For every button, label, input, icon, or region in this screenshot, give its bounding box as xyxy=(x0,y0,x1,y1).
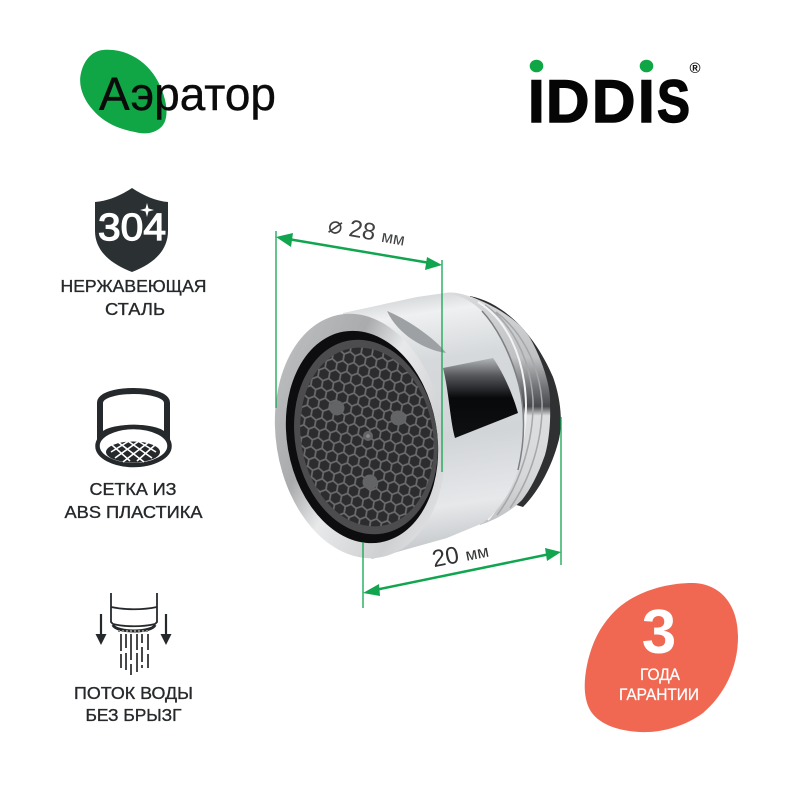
icon: water flow xyxy=(96,593,172,675)
warranty badge: ГАРАНТИИ xyxy=(619,686,699,704)
warranty badge: 3 xyxy=(642,598,676,667)
dimension: length 20 mm: 20 мм xyxy=(430,536,491,573)
warranty badge: ГОДА xyxy=(640,666,680,684)
label: ABS mesh xyxy=(64,479,203,522)
black inner ring xyxy=(270,319,454,555)
dimension: diameter 28 mm xyxy=(276,211,442,472)
label: splash-free water flow: ПОТОК ВОДЫ xyxy=(74,683,193,703)
product photo: aerator xyxy=(258,292,561,571)
dark gasket at the back xyxy=(470,296,561,507)
wrench flat highlight xyxy=(387,311,446,353)
label: splash-free water flow xyxy=(74,683,193,725)
label: ABS mesh: ABS ПЛАСТИКА xyxy=(64,502,203,522)
chrome rim xyxy=(258,301,462,571)
icon: steel shield 304 xyxy=(95,188,168,272)
logo: IDDIS: IDDI xyxy=(528,68,655,135)
label: stainless steel xyxy=(60,276,206,319)
main body xyxy=(343,293,523,559)
label: splash-free water flow: БЕЗ БРЫЗГ xyxy=(86,705,182,725)
icon: steel shield 304: 304 xyxy=(98,207,166,249)
label: stainless steel: СТАЛЬ xyxy=(105,299,165,319)
title: green blob with heading xyxy=(80,50,276,133)
dimension: diameter 28 mm: ⌀ 28 мм xyxy=(326,211,407,252)
logo: IDDIS xyxy=(528,60,701,135)
gray seal ring xyxy=(279,328,453,546)
dark reflection band xyxy=(443,358,518,438)
icon: aerator mesh xyxy=(98,391,170,465)
thread section xyxy=(445,292,550,525)
title: green blob with heading: Аэратор xyxy=(99,68,276,120)
label: stainless steel: НЕРЖАВЕЮЩАЯ xyxy=(60,276,206,296)
logo: IDDIS: ® xyxy=(690,60,701,77)
warranty badge xyxy=(585,583,738,732)
honeycomb mesh xyxy=(300,348,434,526)
body to thread shoulder xyxy=(482,311,523,470)
dimension: length 20 mm xyxy=(363,417,561,608)
label: ABS mesh: СЕТКА ИЗ xyxy=(90,479,176,499)
logo: IDDIS: S xyxy=(657,68,690,135)
